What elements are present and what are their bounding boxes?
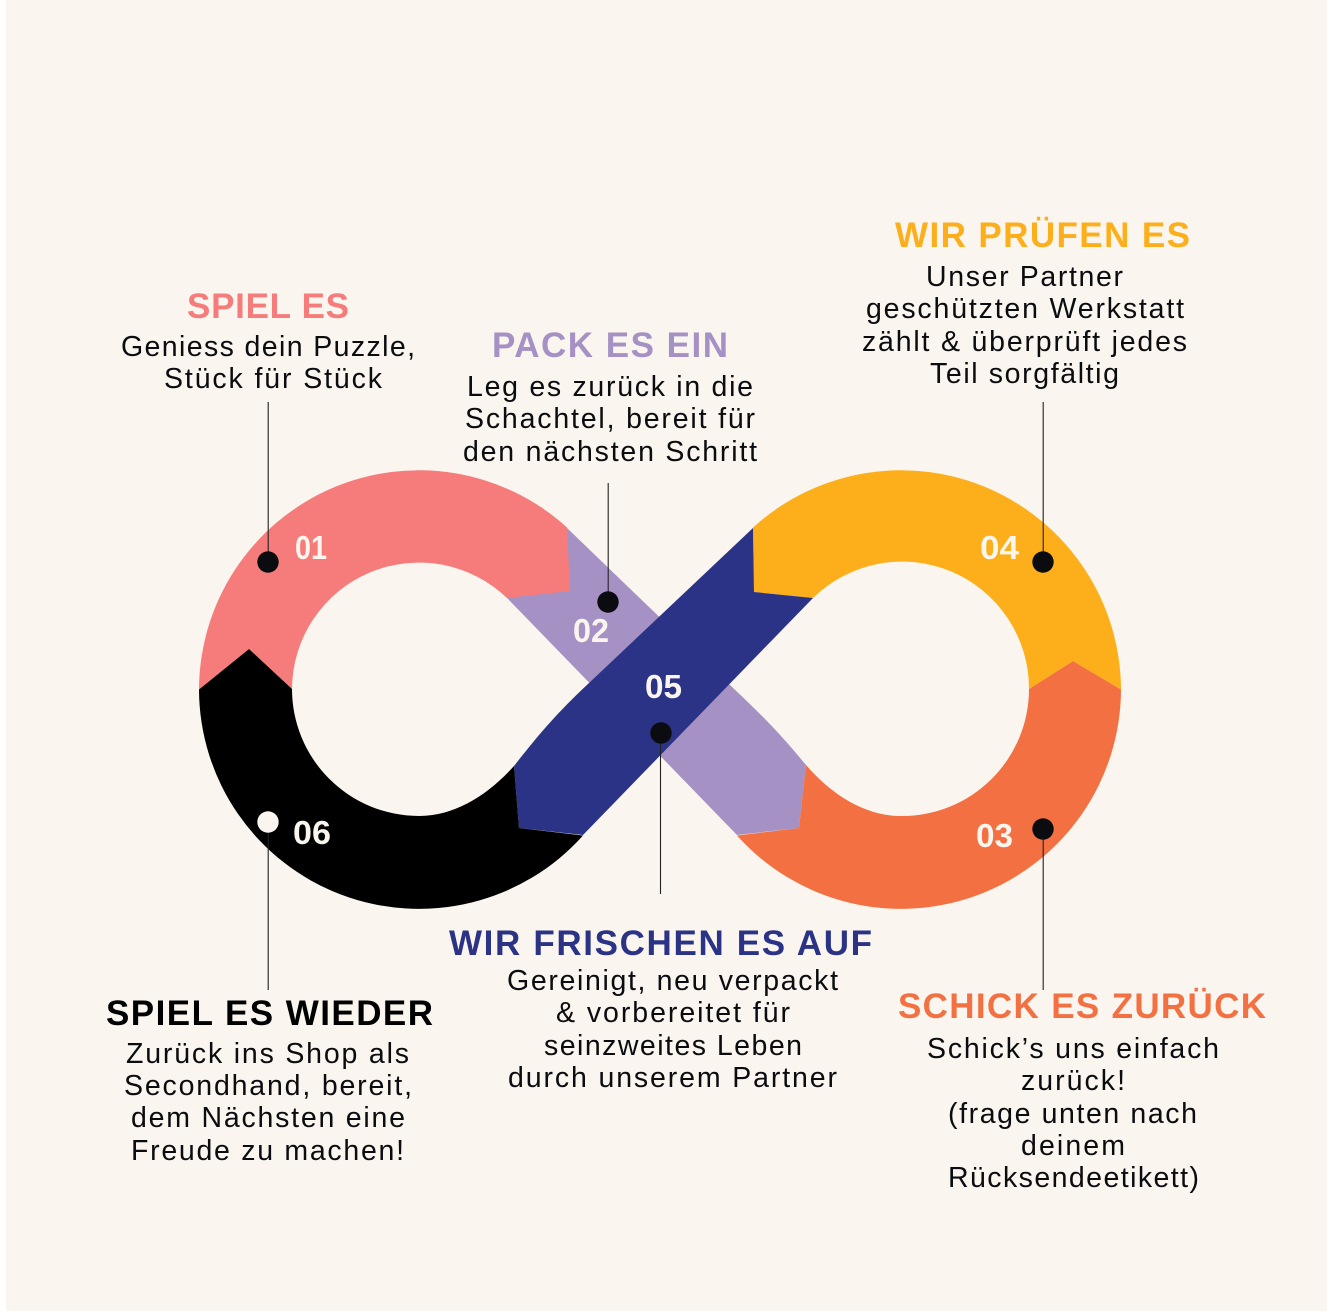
heading: Spiel es wieder: SPIEL ES WIEDER bbox=[106, 994, 433, 1033]
leader line and dot 05 bbox=[650, 722, 672, 894]
callout: Spiel es bbox=[121, 287, 415, 395]
segment 04: yellow arc bbox=[753, 470, 1121, 690]
text: Wir prüfen es description: geschützten Werkstatt bbox=[866, 293, 1184, 325]
text: Wir prüfen es description: zählt & überprüft jedes bbox=[862, 326, 1187, 358]
text: Pack es ein description bbox=[463, 371, 757, 468]
segment 02: lavender band bbox=[507, 528, 806, 835]
text: Schick es zurück description: (frage unten nach bbox=[948, 1098, 1197, 1130]
heading: Spiel es: SPIEL ES bbox=[187, 287, 349, 326]
text: Schick es zurück description: Rücksendeetikett) bbox=[948, 1162, 1199, 1194]
text: Pack es ein description: Schachtel, bereit für bbox=[465, 403, 756, 435]
number 02: 02 bbox=[573, 612, 609, 649]
text: Wir frischen es auf description: durch unserem Partner bbox=[508, 1062, 838, 1094]
heading: Schick es zurück: SCHICK ES ZURÜCK bbox=[898, 987, 1266, 1026]
callout: Wir frischen es auf bbox=[449, 924, 872, 1094]
infinity loop diagram bbox=[199, 470, 1121, 909]
leader line and dot 06 bbox=[257, 811, 279, 990]
text: Schick es zurück description: zurück! bbox=[1021, 1065, 1125, 1097]
number 06: 06 bbox=[293, 814, 331, 851]
text: Spiel es wieder description: dem Nächsten eine bbox=[131, 1102, 405, 1134]
number 03: 03 bbox=[976, 817, 1013, 854]
text: Schick es zurück description: deinem bbox=[1021, 1130, 1125, 1162]
text: Spiel es wieder description: Secondhand, bereit, bbox=[124, 1070, 412, 1102]
callout: Pack es ein bbox=[463, 326, 757, 468]
text: Spiel es description: Geniess dein Puzzle, bbox=[121, 331, 415, 363]
text: Schick es zurück description: Schick’s uns einfach bbox=[927, 1033, 1219, 1065]
text: Schick es zurück description bbox=[927, 1033, 1219, 1194]
segment 06: black arc bbox=[199, 649, 583, 909]
number 01: 01 bbox=[295, 529, 327, 566]
text: Wir frischen es auf description: seinzweites Leben bbox=[544, 1030, 802, 1062]
leader line and dot 01 bbox=[257, 402, 279, 573]
leader line and dot 04 bbox=[1032, 402, 1054, 573]
segment 03: orange arc bbox=[737, 661, 1121, 909]
leader line and dot 03 bbox=[1032, 818, 1054, 990]
text: Wir frischen es auf description bbox=[507, 965, 838, 1094]
heading: Pack es ein: PACK ES EIN bbox=[492, 326, 728, 365]
text: Wir prüfen es description: Unser Partner bbox=[926, 261, 1124, 293]
text: Wir prüfen es description bbox=[862, 261, 1187, 390]
heading: Wir frischen es auf: WIR FRISCHEN ES AUF bbox=[449, 924, 872, 963]
segment 05: navy band bbox=[514, 528, 813, 835]
callout: Wir prüfen es bbox=[862, 216, 1190, 390]
number 04: 04 bbox=[980, 529, 1020, 566]
segment 01: pink arc bbox=[199, 470, 570, 690]
text: Pack es ein description: den nächsten Schritt bbox=[463, 436, 757, 468]
text: Spiel es wieder description bbox=[124, 1038, 412, 1167]
text: Wir prüfen es description: Teil sorgfältig bbox=[930, 358, 1119, 390]
text: Pack es ein description: Leg es zurück in die bbox=[467, 371, 753, 403]
number 05: 05 bbox=[645, 668, 682, 705]
text: Spiel es wieder description: Freude zu machen! bbox=[131, 1135, 404, 1167]
text: Wir frischen es auf description: Gereinigt, neu verpackt bbox=[507, 965, 838, 997]
text: Wir frischen es auf description: & vorbereitet für bbox=[556, 997, 790, 1029]
heading: Wir prüfen es: WIR PRÜFEN ES bbox=[895, 216, 1190, 255]
text: Spiel es wieder description: Zurück ins Shop als bbox=[126, 1038, 409, 1070]
text: Spiel es description bbox=[121, 331, 415, 395]
callout: Schick es zurück bbox=[898, 987, 1266, 1194]
text: Spiel es description: Stück für Stück bbox=[164, 363, 383, 395]
leader line and dot 02 bbox=[597, 483, 619, 613]
callout: Spiel es wieder bbox=[106, 994, 433, 1167]
